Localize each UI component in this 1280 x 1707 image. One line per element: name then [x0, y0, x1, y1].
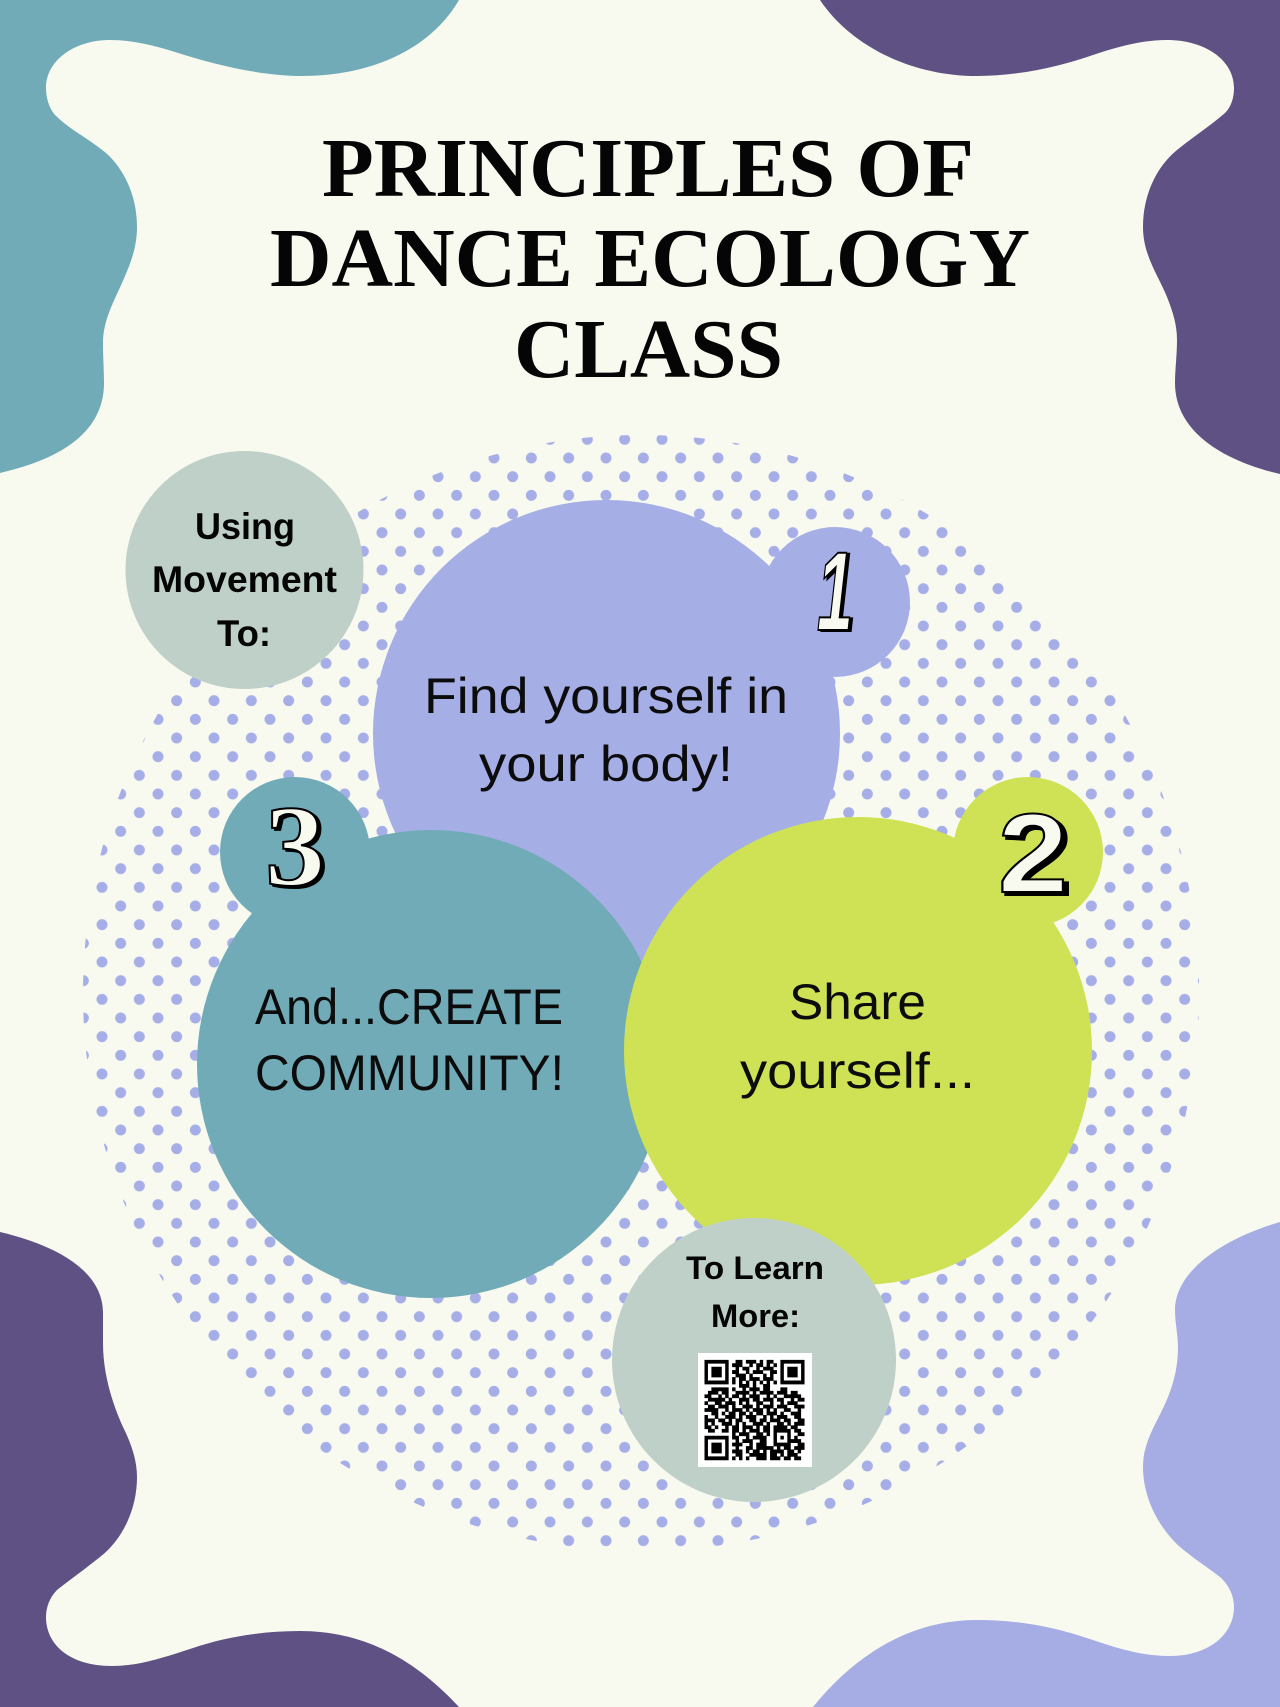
number 2: 2	[1001, 794, 1073, 919]
text: and create community: And...CREATE	[255, 979, 563, 1035]
number 1: 1	[820, 530, 856, 655]
panel 3: create community	[197, 777, 665, 1298]
corner blob: bottom right light purple	[813, 1222, 1280, 1707]
text: and create community: COMMUNITY!	[255, 1045, 564, 1101]
number 1: 1	[817, 529, 853, 654]
title: PRINCIPLES OF	[322, 122, 974, 215]
dotted halftone circle	[83, 435, 1199, 1551]
text: share yourself	[740, 974, 975, 1099]
badge: using movement to: Using	[195, 506, 295, 547]
text: and create community	[255, 979, 564, 1101]
badge: using movement to	[126, 451, 364, 689]
title: CLASS	[514, 303, 783, 396]
number 2: 2	[998, 791, 1068, 916]
corner blob: top left teal	[0, 0, 459, 473]
text: share yourself: yourself...	[740, 1043, 975, 1099]
badge: to learn more with QR: To Learn	[686, 1250, 824, 1286]
text: find yourself in your body: your body!	[479, 736, 733, 792]
number 3: 3	[265, 783, 325, 911]
badge: to learn more with QR: More:	[711, 1298, 800, 1334]
number 1	[817, 529, 856, 655]
title: DANCE ECOLOGY	[270, 212, 1030, 305]
panel 1: find yourself	[373, 500, 910, 967]
badge: using movement to: Movement	[152, 559, 337, 600]
corner blob: top right purple	[820, 0, 1280, 474]
number 3: 3	[268, 785, 328, 913]
panel 2: share yourself	[624, 777, 1103, 1285]
title	[270, 122, 1030, 396]
text: find yourself in your body: Find yourself in	[424, 668, 788, 724]
text: find yourself in your body	[424, 668, 788, 792]
corner blob: bottom left purple	[0, 1232, 459, 1707]
badge: using movement to: To:	[217, 613, 271, 654]
QR code	[698, 1353, 812, 1467]
text: share yourself: Share	[789, 974, 926, 1030]
badge: to learn more with QR	[612, 1218, 896, 1502]
